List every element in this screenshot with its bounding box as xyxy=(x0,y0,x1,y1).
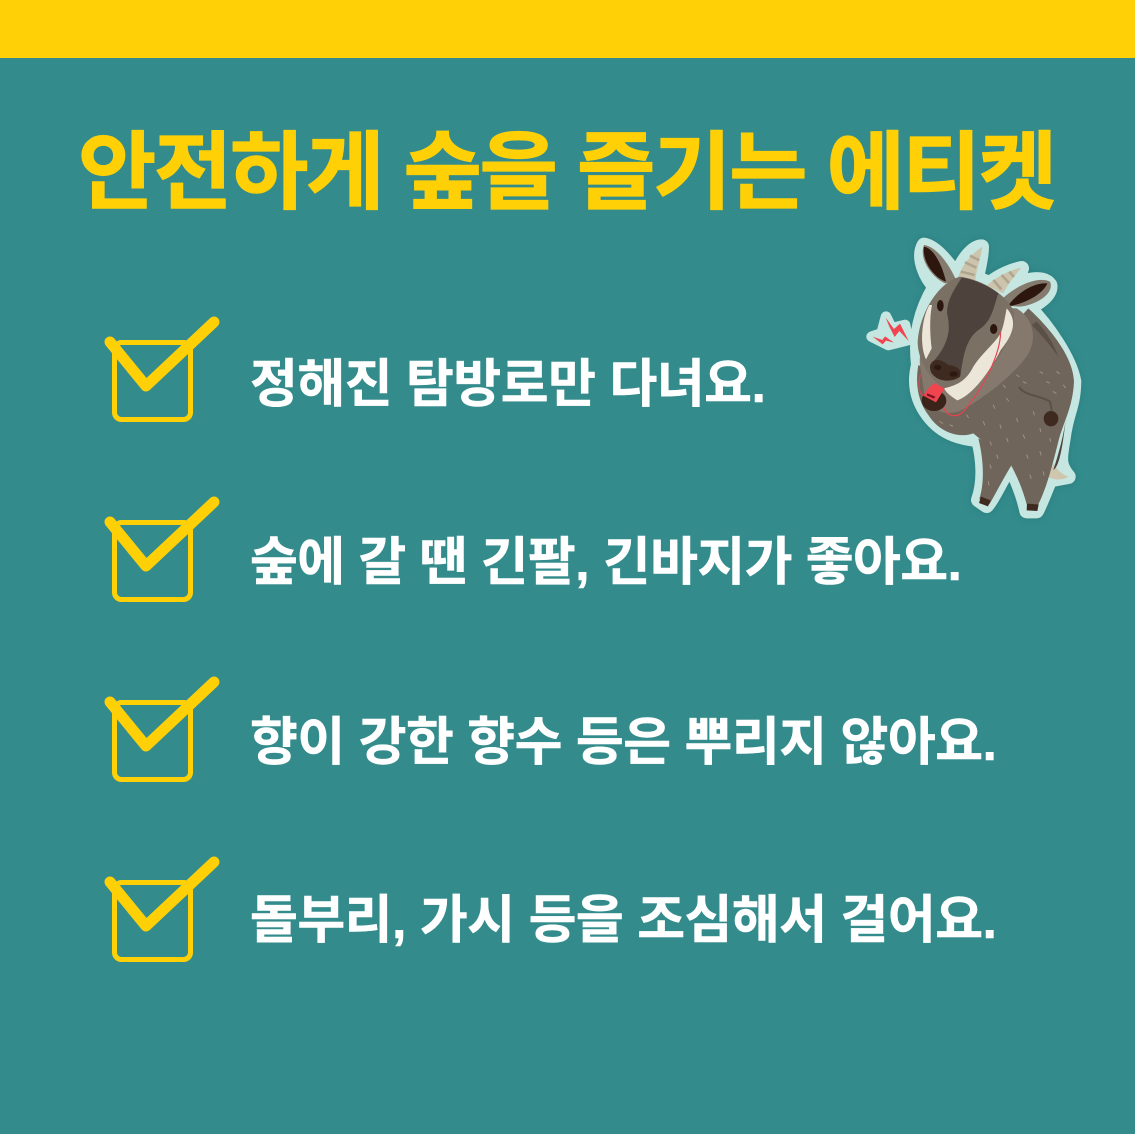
eyes xyxy=(937,300,944,311)
top yellow band xyxy=(0,0,1135,58)
sticker halo xyxy=(916,245,1074,511)
text: item 1: 정해진 탐방로만 다녀요. xyxy=(250,356,766,414)
title: 안전하게 숲을 즐기는 에티켓 xyxy=(78,126,1057,221)
head xyxy=(918,277,1014,393)
checklist item 4 xyxy=(110,862,997,960)
tail xyxy=(1048,463,1069,480)
checklist item 2 xyxy=(110,502,962,600)
nose xyxy=(930,360,961,381)
white cheek patches xyxy=(922,305,932,359)
alert zigzag xyxy=(873,318,909,344)
text: item 3: 향이 강한 향수 등은 뿌리지 않아요. xyxy=(250,714,997,772)
icon: checkbox 2 xyxy=(110,502,214,600)
checklist item 3 xyxy=(110,682,997,780)
icon: checkbox 4 xyxy=(110,862,214,960)
whistle xyxy=(923,383,945,402)
horns xyxy=(958,247,982,280)
chest shading xyxy=(920,305,1033,413)
back leg xyxy=(978,438,1012,504)
fur ticks xyxy=(940,372,1065,485)
dark face stripe xyxy=(930,278,998,377)
illustration: goral with whistle xyxy=(872,245,1074,511)
ear left xyxy=(923,245,957,283)
text: item 4: 돌부리, 가시 등을 조심해서 걸어요. xyxy=(250,892,997,950)
sticker shadow xyxy=(916,245,1074,511)
checklist item 1 xyxy=(110,322,766,420)
body xyxy=(917,308,1074,504)
whistle cord xyxy=(919,332,1001,416)
hoof hand xyxy=(922,390,946,411)
ear right xyxy=(997,280,1051,307)
foreleg crease xyxy=(1019,388,1052,410)
text: item 2: 숲에 갈 땐 긴팔, 긴바지가 좋아요. xyxy=(250,534,962,592)
elbow spot xyxy=(1044,411,1058,426)
icon: checkbox 1 xyxy=(110,322,214,420)
icon: checkbox 3 xyxy=(110,682,214,780)
